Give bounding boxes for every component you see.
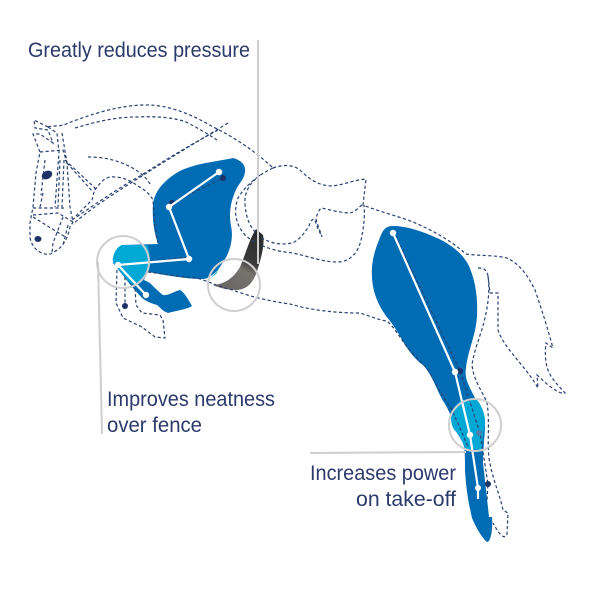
eye: [40, 169, 54, 181]
belly: [148, 272, 468, 448]
label: pressure: Greatly reduces pressure: [28, 38, 250, 62]
callout circles and leader lines: [97, 40, 501, 453]
nostril: [34, 236, 42, 242]
label: neatness: Improves neatness: [107, 387, 275, 411]
saddle arcs: [236, 168, 364, 262]
dashed horse outline: [30, 105, 565, 537]
girth boot: black to grey: [213, 229, 264, 290]
joint markers: navy dots: [122, 175, 491, 487]
tail: [488, 276, 565, 393]
far hind leg: [472, 268, 508, 537]
near foreleg: [116, 270, 165, 338]
label: power: Increases power: [310, 461, 456, 485]
neck and back: [48, 105, 273, 168]
chest: [88, 157, 150, 184]
foreleg muscle shape: [113, 158, 245, 313]
hind leg muscle shape: [372, 226, 492, 542]
hind skeleton lines: [390, 230, 481, 498]
fore skeleton lines: [115, 169, 222, 298]
hind dark line: [395, 235, 488, 500]
label: power: [310, 461, 456, 511]
reins: [73, 123, 228, 224]
label: power: on take-off: [356, 487, 456, 511]
foreleg highlight: cyan joint: [113, 245, 150, 286]
head: [30, 120, 73, 254]
label: neatness: [107, 387, 275, 437]
label: neatness: over fence: [107, 413, 202, 437]
hind leg highlight: cyan joint: [451, 400, 485, 450]
foreleg sliver: [210, 267, 220, 279]
